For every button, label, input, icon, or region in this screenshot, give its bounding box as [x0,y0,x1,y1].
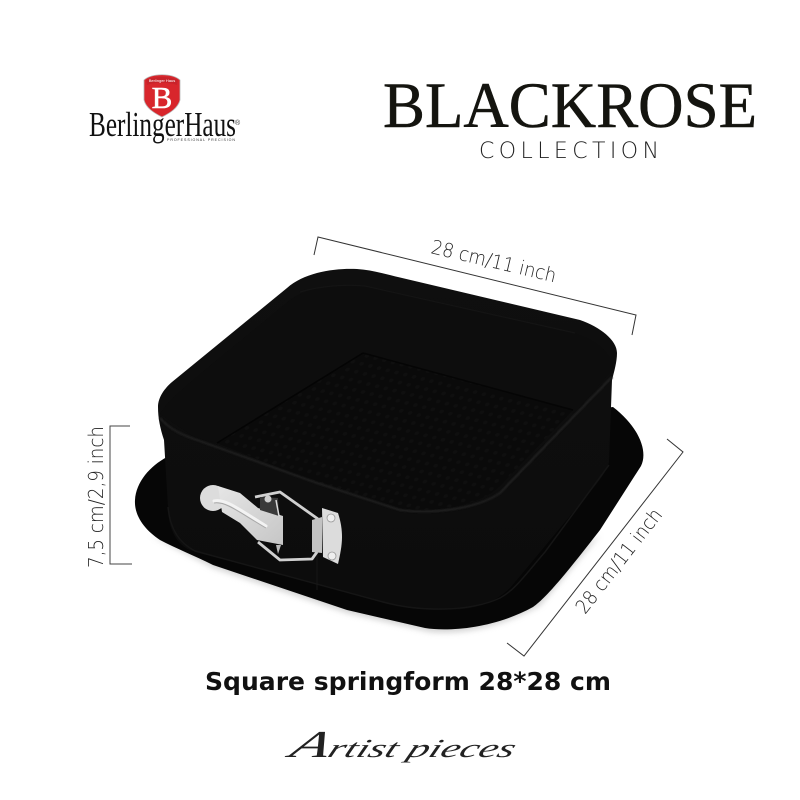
latch lever [218,486,283,545]
pan shadow [150,535,600,633]
logo registered mark: ® [235,119,241,127]
pan base plate [135,407,643,629]
latch bracket [312,517,322,553]
dimension: top width: 28 cm/11 inch [429,235,559,287]
logo wordmark: BerlingerHaus [89,105,236,144]
icon: logo shield [144,75,180,117]
logo tagline: PROFESSIONAL PRECISION [167,138,235,142]
icon: logo shield: B [152,80,172,115]
latch rivets [327,514,336,560]
latch hinge [260,497,279,516]
heading: BLACKROSE collection [383,70,757,164]
dimension: side depth [507,439,683,656]
dimension: side depth: 28 cm/11 inch [571,504,667,618]
pan rim highlights [160,285,612,609]
latch wire loop [255,492,318,560]
tagline: Artist pieces: Artist pieces [280,723,526,766]
latch lever groove [214,501,266,526]
collection name: BLACKROSE [383,70,757,142]
dimension: height: 7,5 cm/2,9 inch [84,426,108,568]
pan wall [158,269,617,610]
pan dimpled floor [217,353,573,510]
collection subtitle: COLLECTION [479,139,659,164]
product name: Square springform 28*28 cm [205,667,611,696]
latch plate [322,508,342,564]
icon: logo shield: Berlinger Haus [149,78,175,83]
latch disc handle [200,485,226,511]
pan inner back wall [160,285,614,443]
latch pin [276,545,281,554]
logo: Berlinger Haus [89,75,241,144]
latch [200,485,342,564]
product: springform pan [135,269,643,633]
dimension: top width [314,235,636,335]
dimension: height [84,426,132,568]
